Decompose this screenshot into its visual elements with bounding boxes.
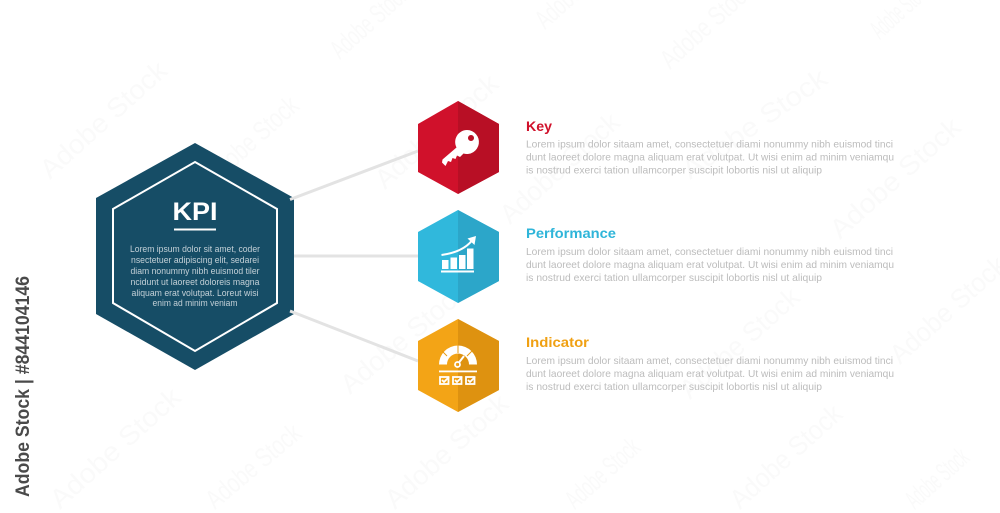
icon: growth chart	[441, 236, 476, 272]
text: Adobe Stock	[824, 111, 967, 244]
text block: Performance: Lorem ipsum dolor sitaam amet, consectetuer diami nonummy nibh euismod tinci	[526, 246, 893, 258]
text: Adobe Stock	[34, 55, 173, 184]
text block: Key: dunt laoreet dolore magna aliquam erat volutpat. Ut wisi enim ad minim veniamqu	[526, 152, 894, 164]
text block: Key: is nostrud exerci tation ullamcorper suscipit lobortis nisl ut aliquip	[526, 164, 822, 176]
text: Adobe Stock	[676, 63, 833, 185]
icon: key	[442, 130, 479, 166]
text: Adobe Stock	[44, 381, 187, 513]
text block: Indicator: dunt laoreet dolore magna aliquam erat volutpat. Ut wisi enim ad minim veniamqu	[526, 368, 894, 380]
text block: KPI description: diam nonummy nibh euismod tiler	[130, 266, 260, 277]
text block: Indicator: is nostrud exerci tation ullamcorper suscipit lobortis nisl ut aliquip	[526, 381, 822, 393]
stock id text: Adobe Stock | #844104146	[13, 276, 34, 497]
heading: KPI: KPI	[172, 198, 218, 226]
text block: Performance: Performance	[526, 225, 616, 241]
connector lines	[290, 151, 418, 361]
text block: KPI description: aliquam erat volutpat. Loreut wisi	[132, 288, 258, 299]
text block: Indicator: Indicator	[526, 334, 590, 350]
text block: KPI description: Lorem ipsum dolor sit amet, coder	[130, 244, 260, 255]
text block: Performance: dunt laoreet dolore magna aliquam erat volutpat. Ut wisi enim ad minim veniamqu	[526, 259, 894, 271]
text: Adobe Stock	[335, 277, 473, 400]
text block: KPI description: enim ad minim veniam	[152, 298, 238, 309]
text: Adobe Stock	[559, 432, 646, 513]
text block: Key: Key	[526, 118, 552, 134]
text block: Performance	[526, 225, 894, 284]
text block: Indicator	[526, 334, 894, 393]
text block: Performance: is nostrud exerci tation ullamcorper suscipit lobortis nisl ut aliquip	[526, 272, 822, 284]
icon: gauge with checkboxes	[439, 345, 477, 384]
text block: Key: Lorem ipsum dolor sitaam amet, consectetuer diami nonummy nibh euismod tinci	[526, 138, 893, 150]
text block: KPI description: nsectetuer adipiscing elit, sedarei	[131, 255, 259, 266]
text: Adobe Stock	[200, 417, 307, 513]
text block: Indicator: Lorem ipsum dolor sitaam amet, consectetuer diami nonummy nibh euismod tinci	[526, 355, 893, 367]
text: Adobe Stock	[674, 281, 806, 404]
icon: chart hexagon	[418, 210, 499, 303]
text: Adobe Stock	[494, 106, 626, 229]
text: Adobe Stock	[379, 388, 515, 513]
heading underline	[174, 228, 216, 230]
panel: KPI hexagon	[96, 143, 294, 370]
text: Adobe Stock	[199, 90, 305, 189]
text block: KPI description	[130, 244, 260, 309]
icon: gauge hexagon	[418, 319, 499, 412]
text block: Key	[526, 118, 894, 176]
text: Adobe Stock	[724, 398, 848, 513]
icon: key hexagon	[418, 101, 499, 194]
text block: KPI description: ncidunt ut laoreet doloreis magna	[130, 277, 260, 288]
text: Adobe Stock	[369, 68, 505, 194]
